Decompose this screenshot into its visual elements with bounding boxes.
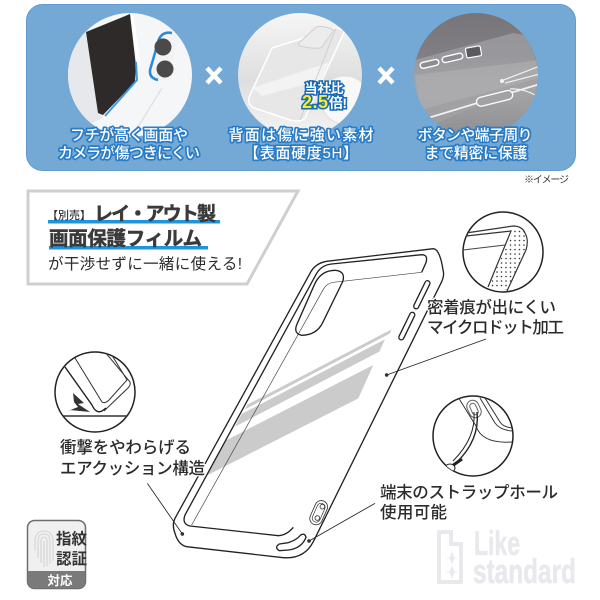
heading underline	[49, 246, 208, 250]
callout: strap hole detail	[433, 396, 513, 476]
icon: multiply sign	[379, 68, 393, 83]
caption: precise protection: まで精密に保護	[424, 145, 528, 162]
leader lines	[147, 339, 486, 543]
caption: raised edge: フチが高く画面や	[70, 126, 188, 144]
callout: micro dot detail	[463, 212, 543, 292]
phone case line drawing	[147, 249, 486, 558]
caption: precise protection: ボタンや端子周り	[418, 127, 532, 144]
label: air cushion: エアクッション構造	[60, 459, 205, 478]
watermark: Like standard	[437, 525, 576, 591]
lens cutout	[308, 499, 330, 527]
caption: raised edge: カメラが傷つきにくい	[58, 144, 200, 162]
label: micro dot: マイクロドット加工	[427, 318, 564, 337]
caption: hard back: 背面は傷に強い素材	[228, 126, 374, 144]
inner thin line	[192, 272, 422, 525]
photo: hard back material	[238, 13, 369, 137]
icon: logo	[437, 530, 463, 584]
heading underline	[48, 220, 220, 224]
icon: fingerprint	[35, 531, 53, 567]
strap slot	[277, 534, 306, 551]
label: 対応: 対応	[47, 573, 73, 588]
inner rim	[184, 255, 427, 536]
label: strap hole: 端末のストラップホール	[380, 483, 558, 502]
caption: hard back: 【表面硬度5H】	[244, 144, 358, 162]
label: 指紋認証: 認証	[56, 550, 87, 568]
badge: 2.5 times hardness: 当社比	[304, 81, 344, 96]
label: strap hole: 使用可能	[380, 503, 448, 522]
note: image only: ※イメージ	[524, 175, 569, 186]
outer shell	[173, 249, 444, 558]
badge: 2.5 times hardness: 倍!	[329, 95, 347, 111]
photo: precise cutouts	[410, 13, 540, 137]
side buttons	[398, 280, 431, 341]
heading line 2: 画面保護フィルム	[49, 228, 202, 250]
logo text: Like	[474, 525, 520, 563]
heading line 1: 【別売】	[47, 208, 91, 222]
panel: screen film compatibility	[28, 191, 298, 284]
panel: top feature band	[26, 4, 576, 170]
camera cutout	[296, 270, 343, 335]
badge: 2.5 times hardness: 2.5	[302, 92, 328, 112]
photo: raised bezel phone case	[68, 13, 192, 137]
badge: 2.5 times hardness	[302, 81, 347, 112]
label: micro dot: 密着痕が出にくい	[427, 297, 556, 317]
label: 指紋認証: 指紋	[56, 530, 87, 548]
label: air cushion: 衝撃をやわらげる	[60, 438, 191, 457]
badge: fingerprint support	[28, 520, 87, 588]
sub text: が干渉せずに一緒に使える!	[48, 255, 242, 273]
heading line 1: レイ・アウト製	[94, 203, 216, 225]
logo sparkle	[447, 553, 457, 577]
icon: multiply sign	[207, 68, 221, 83]
colour bands	[207, 329, 392, 476]
callout: air cushion detail	[55, 352, 135, 432]
